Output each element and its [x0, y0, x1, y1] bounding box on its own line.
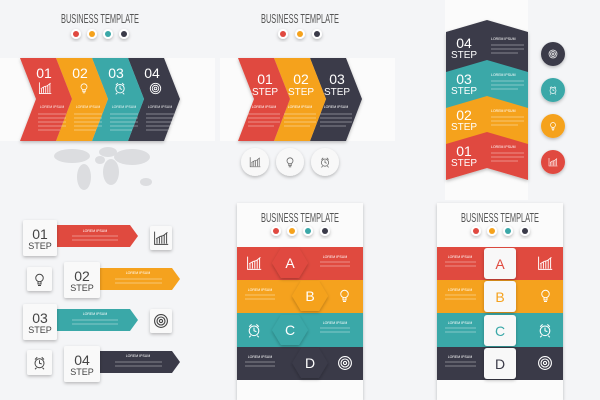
- hexagons: [272, 248, 328, 378]
- panel: bottom-left step arrows: LOREM IPSUM: [126, 354, 150, 358]
- panel: top-left chevron process: LOREM IPSUM: [76, 105, 100, 109]
- panel: bottom-left step arrows: LOREM IPSUM: [126, 271, 150, 275]
- title: BUSINESS TEMPLATE: [61, 11, 139, 26]
- panel: top-right vertical steps: 01: [456, 143, 472, 159]
- panel: top-middle 3-step chevrons: STEP: [288, 87, 314, 98]
- icon circles: [241, 148, 339, 176]
- panel: bottom-left step arrows: 04: [74, 352, 90, 368]
- arrows: [57, 225, 138, 247]
- panel: top-right vertical steps: LOREM IPSUM: [491, 73, 516, 77]
- legend dots: [71, 29, 129, 39]
- stacked chevrons: [446, 20, 528, 180]
- panel: top-middle 3-step chevrons: 03: [329, 71, 345, 87]
- panel: bottom-middle hexagon bands: LOREM IPSUM: [248, 355, 272, 359]
- side circles: [541, 42, 565, 174]
- panel: top-right vertical steps: LOREM IPSUM: [491, 37, 516, 41]
- panel: top-right vertical steps: LOREM IPSUM: [491, 109, 516, 113]
- world map: [54, 147, 152, 190]
- panel: bottom-left step arrows: LOREM IPSUM: [83, 229, 107, 233]
- letter boxes: [484, 248, 516, 379]
- panel: bottom-right letter boxes: C: [495, 323, 505, 339]
- panel: top-right vertical steps: STEP: [451, 158, 477, 169]
- chevrons: [238, 58, 362, 141]
- panel: top-middle 3-step chevrons: LOREM IPSUM: [288, 105, 312, 109]
- panel: top-right vertical steps: STEP: [451, 86, 477, 97]
- panel: bottom-middle hexagon bands: A: [285, 255, 295, 271]
- panel: top-middle 3-step chevrons: LOREM IPSUM: [324, 105, 348, 109]
- panel: bottom-right letter boxes: [437, 203, 563, 400]
- panel: bottom-middle hexagon bands: [237, 203, 363, 400]
- panel: top-left chevron process: 02: [72, 65, 88, 81]
- panel: bottom-right letter boxes: LOREM IPSUM: [448, 255, 472, 259]
- panel: bottom-left step arrows: STEP: [70, 367, 94, 377]
- panel: bottom-middle hexagon bands: D: [305, 355, 315, 371]
- step boxes: [23, 220, 172, 382]
- panel: top-left chevron process: 04: [144, 65, 160, 81]
- panel: bottom-right letter boxes: A: [495, 256, 505, 272]
- panel: bottom-left step arrows: STEP: [28, 241, 52, 251]
- panel: bottom-right letter boxes: LOREM IPSUM: [448, 288, 472, 292]
- panel: bottom-right letter boxes: B: [495, 289, 505, 305]
- panel: bottom-right letter boxes: LOREM IPSUM: [448, 355, 472, 359]
- panel: top-right vertical steps: LOREM IPSUM: [491, 145, 516, 149]
- panel: top-middle 3-step chevrons: LOREM IPSUM: [252, 105, 276, 109]
- panel: bottom-right letter boxes: LOREM IPSUM: [448, 321, 472, 325]
- title: BUSINESS TEMPLATE: [261, 11, 339, 26]
- panel: bottom-left step arrows: STEP: [28, 325, 52, 335]
- panel: top-left chevron process: 03: [108, 65, 124, 81]
- panel: top-middle 3-step chevrons: STEP: [252, 87, 278, 98]
- panel: bottom-left step arrows: LOREM IPSUM: [83, 312, 107, 316]
- panel: top-left chevron process: [0, 11, 215, 190]
- panel: top-right vertical steps: [445, 0, 565, 200]
- panel: bottom-left step arrows: 01: [32, 226, 48, 242]
- panel: top-right vertical steps: 03: [456, 71, 472, 87]
- panel: top-middle 3-step chevrons: 02: [293, 71, 309, 87]
- panel: bottom-right letter boxes: D: [495, 356, 505, 372]
- panel: top-left chevron process: LOREM IPSUM: [148, 105, 172, 109]
- panel: top-left chevron process: 01: [36, 65, 52, 81]
- panel: top-middle 3-step chevrons: 01: [257, 71, 273, 87]
- panel: bottom-left step arrows: 02: [74, 268, 90, 284]
- panel: top-right vertical steps: STEP: [451, 50, 477, 61]
- panel: bottom-left step arrows: STEP: [70, 283, 94, 293]
- panel: top-middle 3-step chevrons: [220, 11, 395, 176]
- panel: bottom-left step arrows: 03: [32, 310, 48, 326]
- panel: bottom-middle hexagon bands: LOREM IPSUM: [323, 255, 347, 259]
- title: BUSINESS TEMPLATE: [261, 210, 339, 225]
- chevrons: [20, 58, 180, 141]
- panel: top-left chevron process: LOREM IPSUM: [40, 105, 64, 109]
- panel: bottom-middle hexagon bands: C: [285, 322, 295, 338]
- panel: top-right vertical steps: 04: [456, 35, 472, 51]
- panel: bottom-middle hexagon bands: LOREM IPSUM: [248, 288, 272, 292]
- title: BUSINESS TEMPLATE: [461, 210, 539, 225]
- panel: bottom-middle hexagon bands: B: [305, 288, 315, 304]
- panel: top-left chevron process: LOREM IPSUM: [112, 105, 136, 109]
- panel: top-middle 3-step chevrons: STEP: [324, 87, 350, 98]
- panel: bottom-middle hexagon bands: LOREM IPSUM: [323, 321, 347, 325]
- panel: top-right vertical steps: 02: [456, 107, 472, 123]
- panel: top-right vertical steps: STEP: [451, 122, 477, 133]
- legend dots: [278, 29, 322, 39]
- panel: bottom-left step arrows: [23, 220, 180, 382]
